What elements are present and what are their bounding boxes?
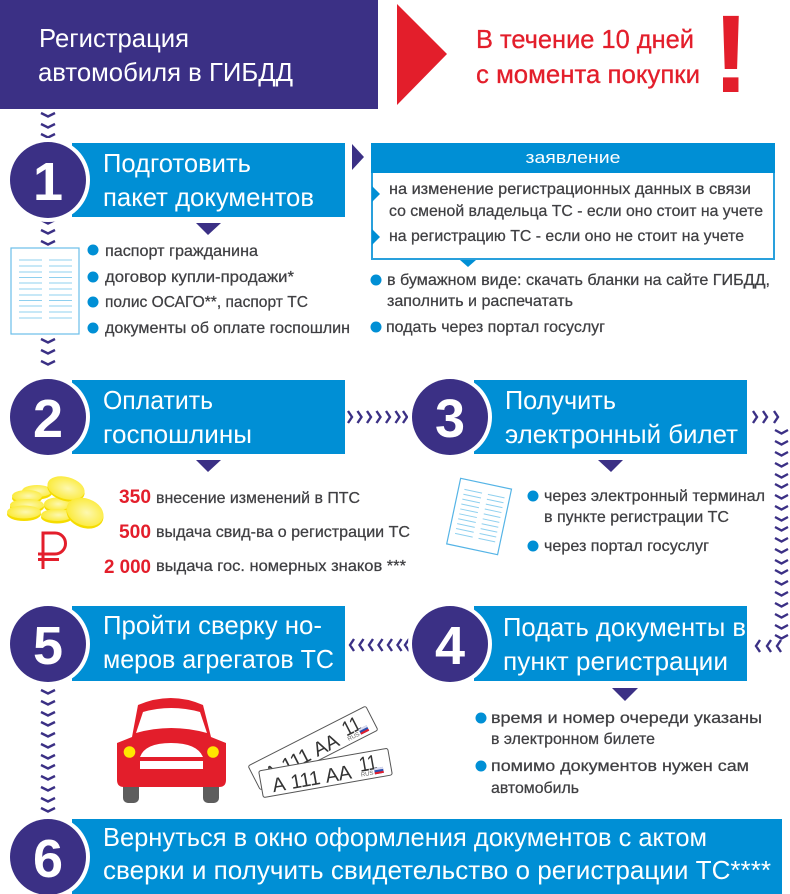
- step 3 banner: 3: [435, 389, 465, 449]
- step 3 banner: [408, 375, 747, 459]
- list: required documents: документы об оплате госпошлин: [105, 320, 350, 337]
- icon: licence plate front: А 111 АА: [271, 761, 354, 797]
- step 1 banner: [6, 138, 345, 222]
- step 2 banner: 2: [33, 389, 63, 449]
- icon: licence plate back: RUS: [347, 732, 361, 743]
- arrow: step 4 down: [612, 688, 638, 701]
- step 6 banner: Вернуться в окно оформления документов с актом: [103, 822, 707, 852]
- deadline callout: с момента покупки: [476, 59, 700, 89]
- arrow: step 2 down: [196, 460, 221, 472]
- step 1 banner: 1: [33, 152, 63, 212]
- panel: application form: на регистрацию ТС - если оно не стоит на учете: [389, 228, 744, 245]
- list: application options: [370, 272, 770, 336]
- list: state fees: 350: [119, 487, 151, 508]
- list: submission notes: автомобиль: [491, 780, 579, 797]
- panel: application form: на изменение регистрационных данных в связи: [389, 181, 751, 198]
- list: state fees: внесение изменений в ПТС: [156, 490, 360, 507]
- panel: application form: заявление: [526, 148, 620, 167]
- step 2 banner: [6, 375, 345, 459]
- arrow: chevrons step 2 to step 3: [348, 411, 407, 423]
- list: application options: заполнить и распечатать: [387, 293, 573, 310]
- arrow: step 3 down: [598, 460, 623, 472]
- icon: document: [11, 248, 79, 334]
- list: required documents: паспорт гражданина: [105, 243, 258, 260]
- list: ticket options: через электронный терминал: [544, 488, 765, 505]
- step 6 banner: сверки и получить свидетельство о регистрации ТС****: [103, 855, 771, 885]
- list: state fees: 2 000: [104, 557, 151, 578]
- list: ticket options: [528, 488, 765, 555]
- step 6 banner: 6: [33, 829, 63, 889]
- list: required documents: договор купли-продажи*: [105, 269, 294, 286]
- list: application options: в бумажном виде: скачать бланки на сайте ГИБДД,: [387, 272, 770, 289]
- arrow: chevrons from step 3 down to step 4: [753, 411, 788, 652]
- header: title panel: [0, 0, 378, 109]
- icon: licence plate front: RUS: [361, 771, 374, 779]
- list: state fees: 500: [119, 522, 151, 543]
- deadline callout: В течение 10 дней: [476, 24, 694, 54]
- arrow: chevrons under step 1: [41, 220, 55, 244]
- list: state fees: выдача свид-ва о регистрации ТС: [156, 524, 410, 541]
- arrow: step 1 to application: [352, 144, 364, 170]
- arrow: chevrons from document to step 2: [41, 339, 55, 364]
- list: submission notes: в электронном билете: [491, 731, 655, 748]
- step 2 banner: госпошлины: [103, 419, 252, 449]
- step 4 banner: [408, 602, 747, 686]
- step 5 banner: меров агрегатов ТС: [103, 644, 334, 674]
- panel: application form: со сменой владельца ТС - если оно стоит на учете: [389, 203, 763, 220]
- icon: licence plate back: А 111 АА: [262, 730, 344, 786]
- header: title panel: Регистрация: [39, 23, 189, 53]
- arrow: step 1 down: [196, 223, 221, 235]
- header: title panel: автомобиля в ГИБДД: [38, 57, 293, 87]
- step 5 banner: Пройти сверку но-: [103, 610, 322, 640]
- list: submission notes: [476, 710, 762, 797]
- icon: licence plate back: [248, 706, 379, 791]
- list: ticket options: через портал госуслуг: [544, 538, 709, 555]
- arrow: chevrons step 4 to step 5: [350, 639, 409, 651]
- list: submission notes: время и номер очереди указаны: [491, 710, 762, 727]
- step 4 banner: пункт регистрации: [503, 646, 728, 676]
- icon: tilted document: [447, 478, 512, 555]
- icon: red car: [117, 698, 226, 803]
- step 5 banner: [6, 602, 345, 686]
- step 6 banner: [6, 815, 782, 894]
- step 1 banner: Подготовить: [103, 148, 251, 178]
- step 3 banner: Получить: [505, 385, 616, 415]
- list: application options: подать через портал госуслуг: [386, 319, 605, 336]
- icon: licence plate front: [259, 748, 393, 799]
- arrow: chevrons step 5 to step 6: [41, 690, 55, 812]
- icon: licence plate front: 11: [357, 751, 379, 777]
- step 4 banner: Подать документы в: [503, 612, 746, 642]
- step 3 banner: электронный билет: [505, 419, 738, 449]
- step 2 banner: Оплатить: [103, 385, 213, 415]
- icon: licence plate back: 11: [338, 712, 365, 741]
- arrow: red triangle: [397, 4, 447, 105]
- list: state fees: [104, 487, 410, 578]
- icon: ruble sign: [38, 533, 66, 569]
- list: ticket options: в пункте регистрации ТС: [544, 509, 729, 526]
- step 5 banner: 5: [33, 616, 63, 676]
- list: required documents: [88, 243, 350, 337]
- deadline callout: [476, 24, 700, 89]
- panel: application form: [371, 143, 775, 267]
- list: required documents: полис ОСАГО**, паспорт ТС: [105, 294, 308, 311]
- icon: coins: [7, 472, 108, 534]
- step 1 banner: пакет документов: [103, 182, 314, 212]
- step 4 banner: 4: [435, 616, 465, 676]
- list: state fees: выдача гос. номерных знаков ***: [156, 558, 406, 575]
- list: submission notes: помимо документов нужен сам: [491, 758, 749, 775]
- arrow: chevrons from header to step 1: [41, 113, 55, 138]
